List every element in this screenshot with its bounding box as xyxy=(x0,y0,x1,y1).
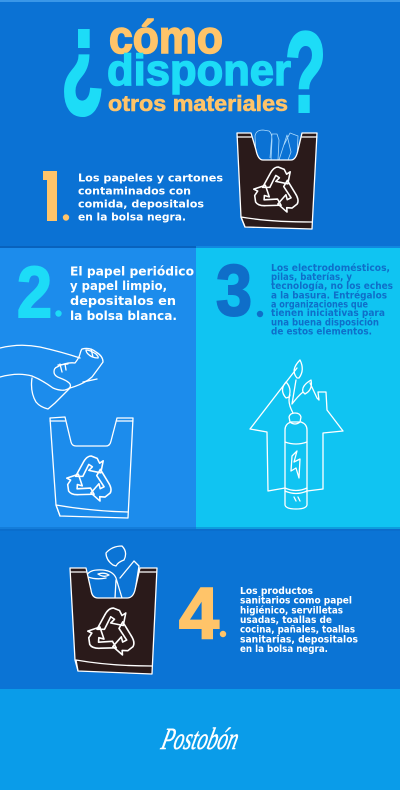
step 2 text: El papel periódico xyxy=(70,264,194,278)
title xyxy=(61,0,326,136)
step 1 text: en la bolsa negra. xyxy=(78,211,186,223)
step 4 text: higiénico, servilletas xyxy=(240,604,343,616)
step 4 text: en la bolsa negra. xyxy=(240,644,328,655)
step 3 text: pilas, baterías, y xyxy=(271,271,353,283)
step 1 number: 1 xyxy=(38,157,62,237)
title: word disponer: disponer xyxy=(107,46,291,95)
step 1 text: Los papeles y cartones xyxy=(78,173,223,185)
title: otros materiales: otros materiales xyxy=(108,91,288,116)
background: top band xyxy=(0,0,400,248)
step 3 text: una buena disposición xyxy=(271,316,379,328)
icon: battery in house with leaves xyxy=(250,360,343,509)
step 2 text: y papel limpio, xyxy=(70,279,167,293)
step 3 text: de estos elementos. xyxy=(271,326,372,337)
step 4 text: sanitarios como papel xyxy=(240,596,352,606)
step 4 text: Los productos xyxy=(240,586,313,597)
icon: white bag xyxy=(50,417,133,518)
step 3 text: a organizaciones que xyxy=(271,299,368,310)
title: closing question mark: ? xyxy=(285,10,326,136)
logo: Postobón: Postobón xyxy=(158,721,243,756)
panel: step 4 background xyxy=(0,529,400,689)
step 2 number: 2 xyxy=(17,253,52,333)
step 4 text: usadas, toallas de xyxy=(240,615,332,626)
step 3 text: tienen iniciativas para xyxy=(271,308,385,319)
step 4 text xyxy=(240,586,358,655)
step 3 number: 3 xyxy=(216,251,252,331)
step 3 text: Los electrodomésticos, xyxy=(271,262,390,274)
panel: step 2 background xyxy=(0,248,196,529)
step 4 number: 4 xyxy=(179,574,219,654)
step 1 text: comida, depositalos xyxy=(78,198,204,210)
icon: black bag with paper and cardboard xyxy=(237,130,317,229)
title: word como: cómo xyxy=(109,11,223,63)
step 1 text: contaminados con xyxy=(78,186,191,198)
panel: footer background xyxy=(0,689,400,790)
step 4 text: cocina, pañales, toallas xyxy=(240,625,355,636)
step 2 text: depositalos en xyxy=(70,294,176,308)
step 2 text: la bolsa blanca. xyxy=(70,309,177,323)
icon: black bag with toilet roll and tissue xyxy=(70,546,157,674)
panel: step 3 background xyxy=(196,248,400,529)
step 1 text xyxy=(78,173,223,223)
step 3 text: tecnología, no los eches xyxy=(271,280,393,292)
step 4 text: sanitarias, depositalos xyxy=(240,635,358,646)
step 2 text xyxy=(70,264,194,323)
step 3 text xyxy=(271,262,393,337)
icon: hand holding paper roll xyxy=(0,345,103,409)
step 1 number xyxy=(43,171,70,221)
step 3 text: a la basura. Entrégalos xyxy=(271,289,387,301)
